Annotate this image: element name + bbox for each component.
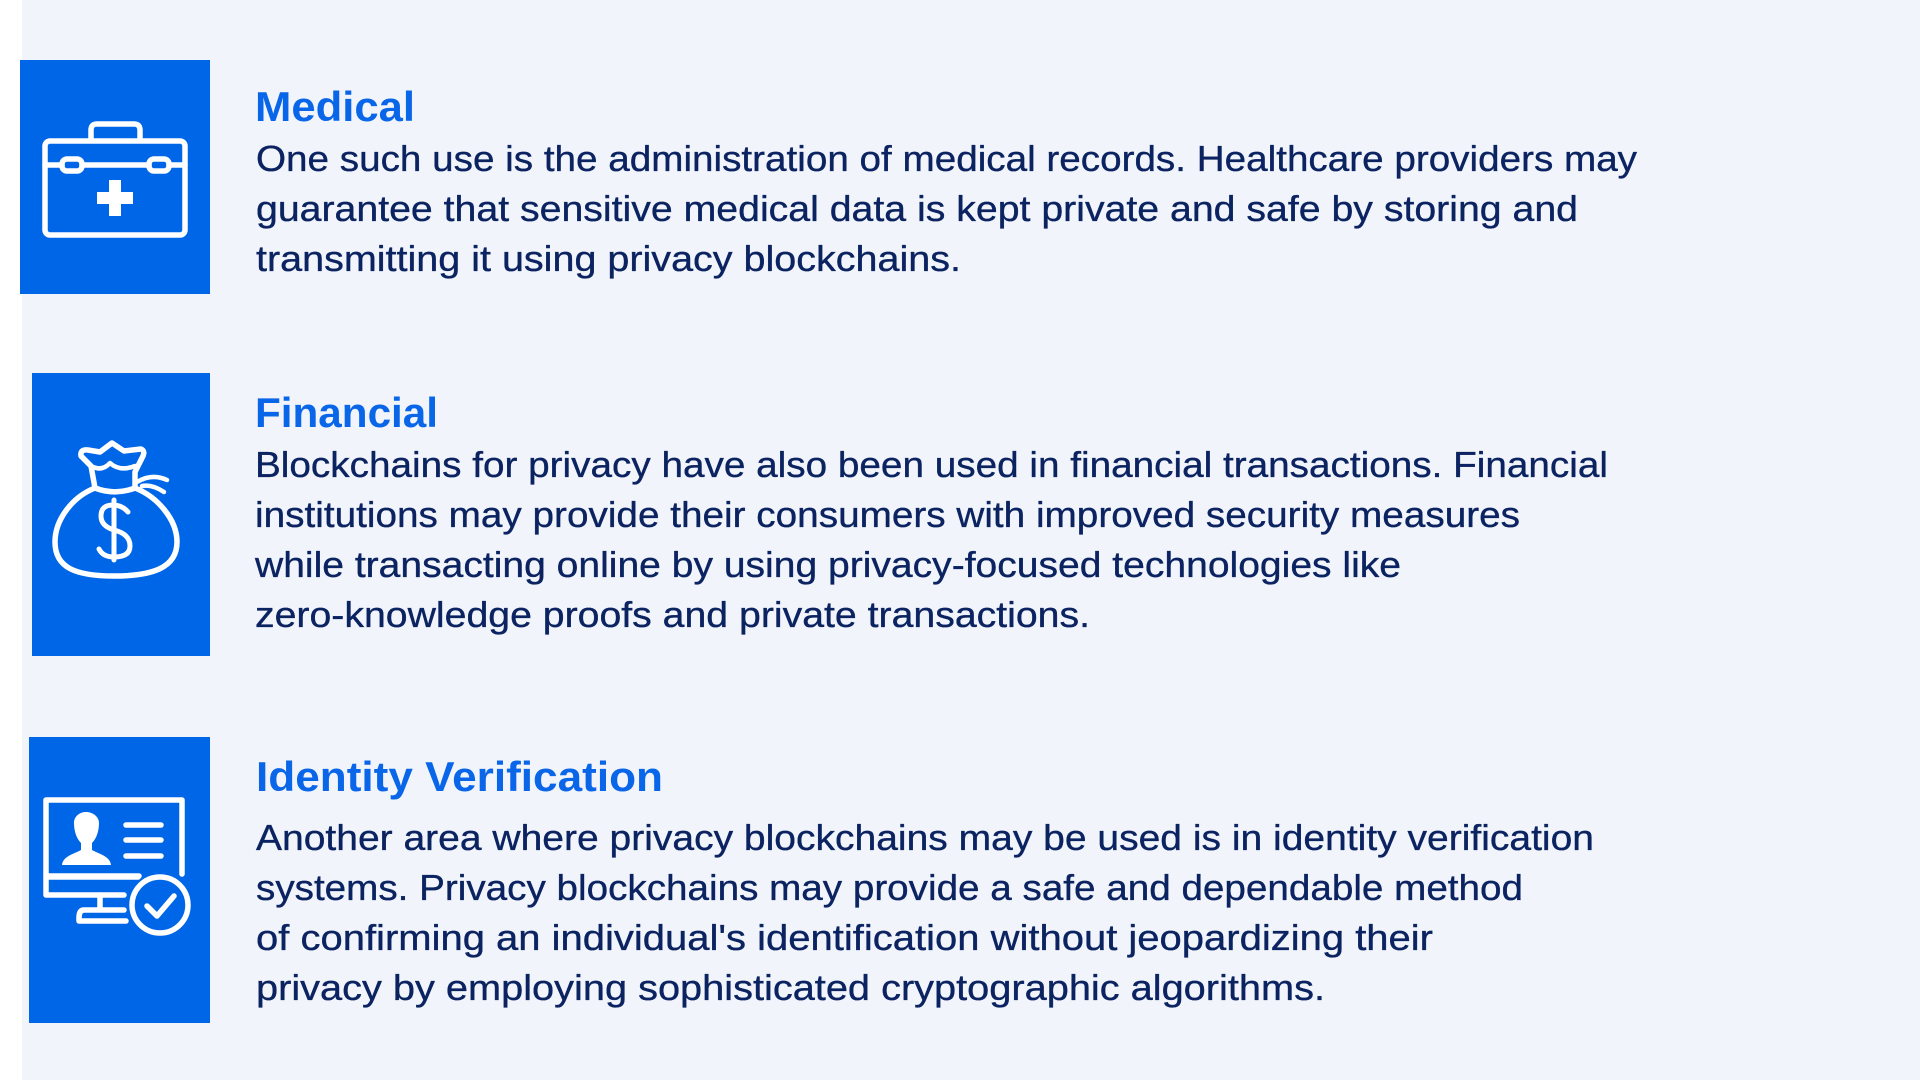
- heading: Financial: Financial: [255, 389, 438, 436]
- text: financial description: [254, 444, 1608, 635]
- text: identity verification description: privacy by employing sophisticated cryptographic algorithms.: [256, 967, 1325, 1008]
- panel: financial: [32, 373, 1608, 656]
- text: identity verification description: [256, 817, 1594, 1008]
- text: financial description: Blockchains for privacy have also been used in financial transactions. Financial: [255, 444, 1608, 485]
- text: financial description: institutions may provide their consumers with improved security measures: [255, 494, 1520, 535]
- text: medical description: One such use is the administration of medical records. Healthcare providers may: [256, 138, 1637, 179]
- panel: medical: [20, 60, 1637, 294]
- text: identity verification description: Another area where privacy blockchains may be used is in identity verification: [256, 817, 1594, 858]
- panel: identity verification: [29, 737, 1594, 1023]
- text: identity verification description: of confirming an individual's identification without jeopardizing their: [256, 917, 1433, 958]
- icon: medical kit: [20, 60, 210, 294]
- text: financial description: zero-knowledge proofs and private transactions.: [255, 594, 1090, 635]
- icon: money bag: [32, 373, 210, 656]
- text: medical description: [256, 138, 1637, 279]
- text: financial description: while transacting online by using privacy-focused technologies like: [254, 544, 1401, 585]
- text: identity verification description: systems. Privacy blockchains may provide a safe and dependable method: [256, 867, 1523, 908]
- heading: Medical: Medical: [255, 83, 415, 130]
- icon: identity monitor with check: [29, 737, 210, 1023]
- text: medical description: guarantee that sensitive medical data is kept private and safe by storing and: [256, 188, 1578, 229]
- text: medical description: transmitting it using privacy blockchains.: [256, 238, 961, 279]
- heading: Identity Verification: Identity Verification: [256, 753, 663, 800]
